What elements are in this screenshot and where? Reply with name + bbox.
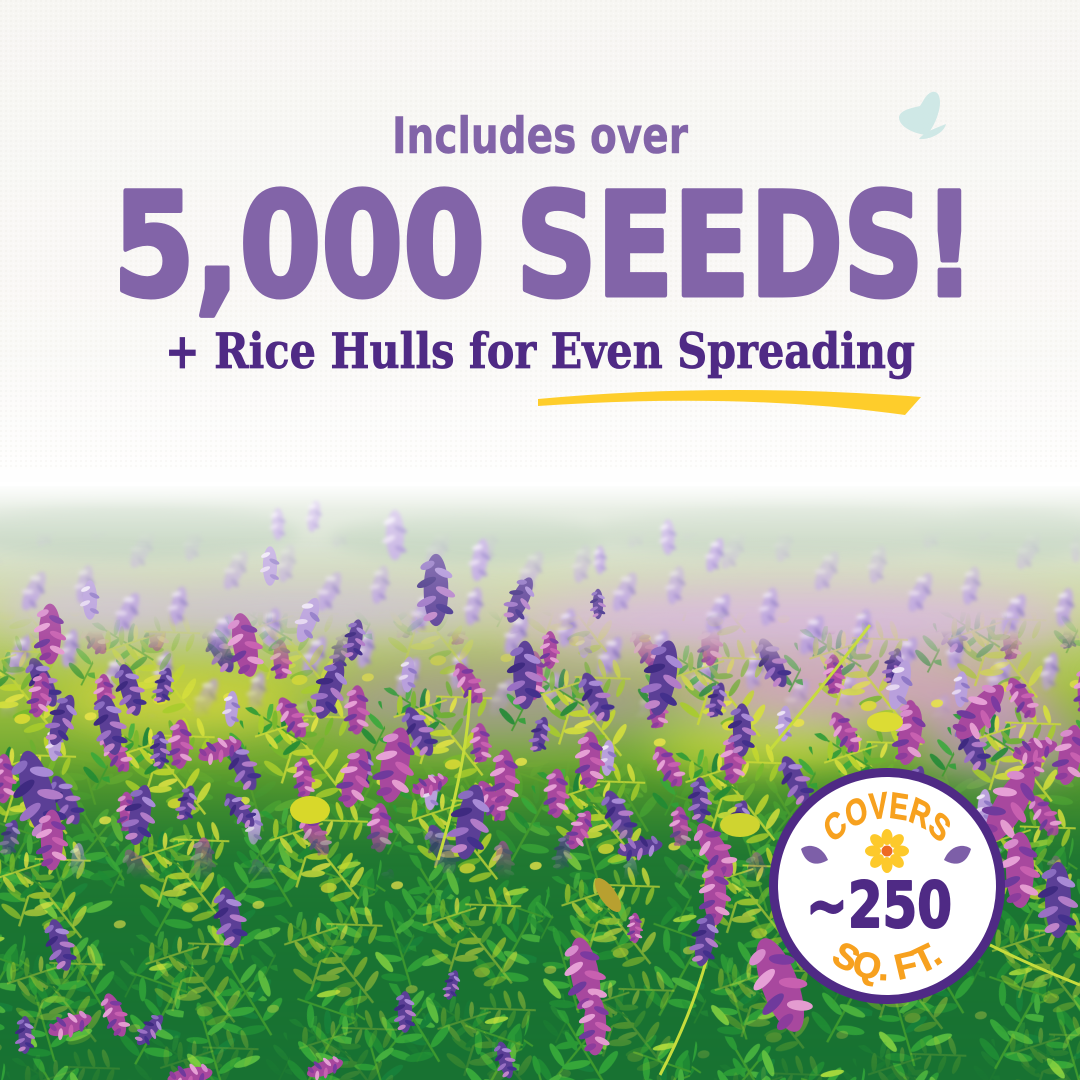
pale distant flower texture	[0, 530, 1080, 720]
distant hazy tree line	[0, 504, 1080, 562]
mid-field flower spikes	[1, 546, 1080, 938]
badge: covers 250 sq ft	[769, 768, 1005, 1004]
dark lower foliage texture	[0, 760, 1080, 1080]
badge text: approx 250: ~250	[806, 869, 952, 942]
mid purple flower texture	[0, 630, 1080, 880]
headline: 5,000 seeds: 5,000	[113, 162, 485, 329]
badge text: sq ft: SQ. FT.	[833, 942, 942, 986]
yellow underline swoosh	[538, 390, 921, 415]
icon: yellow flower	[865, 829, 909, 873]
soft colour patches	[0, 584, 1080, 780]
badge text: covers	[824, 792, 950, 841]
icon: right purple leaf	[944, 846, 971, 864]
foreground flower spikes	[14, 712, 903, 1080]
icon: pale blue butterfly	[899, 92, 946, 139]
bright stems	[438, 625, 1080, 1075]
white fog fading the top of the photo	[0, 482, 1080, 652]
background: linen canvas	[0, 0, 1080, 500]
yellow-green mid foliage texture	[0, 610, 1080, 1080]
heading: includes over: Includes over	[392, 107, 688, 165]
distant pale flower spikes	[269, 499, 730, 583]
subheading: rice hulls: + Rice Hulls for Even Spreading	[165, 322, 915, 380]
photo: meadow of purple vetch flowers	[0, 482, 1080, 1080]
icon: left purple leaf	[801, 846, 828, 864]
badge text: covers: COVERS	[824, 792, 950, 841]
